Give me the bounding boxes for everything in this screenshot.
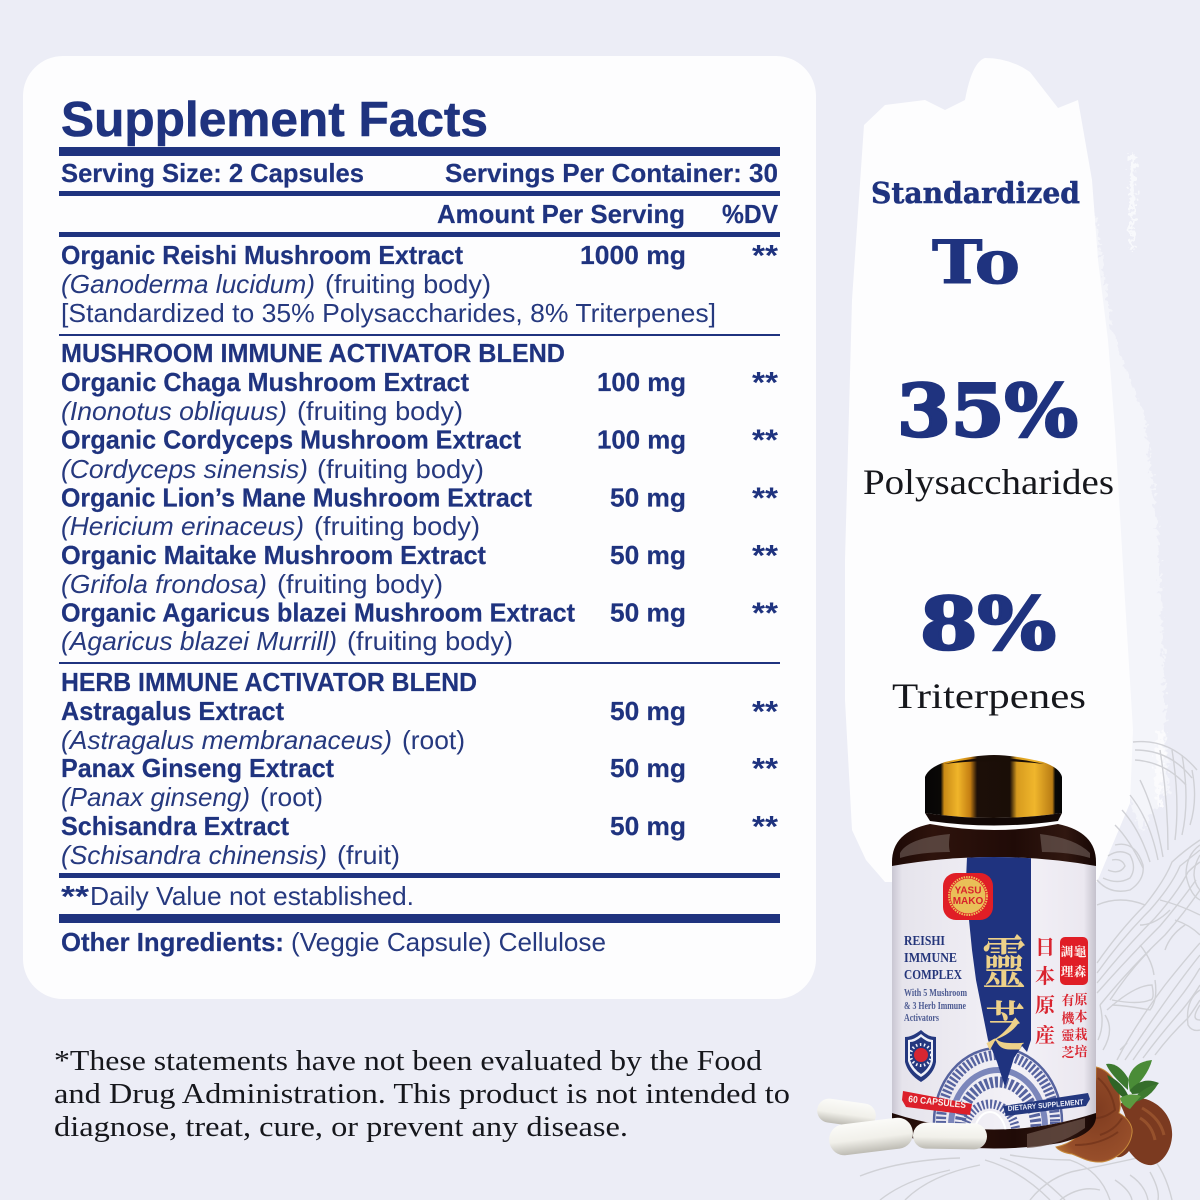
- glass base reflection: [1027, 1118, 1085, 1148]
- mushroom fan illustration: [932, 1048, 1064, 1130]
- mushroom immune activator blend: Organic Cordyceps Mushroom Extract: [61, 424, 521, 454]
- herb immune activator blend: (Panax ginseng): [61, 782, 250, 812]
- serving information: Serving Size: 2 Capsules: [61, 158, 364, 188]
- herb immune activator blend: 50 mg: [610, 811, 686, 841]
- red vertical origin text: [1035, 931, 1056, 1048]
- herb immune activator blend: (root): [402, 725, 465, 755]
- mushroom immune activator blend: (Hericium erinaceus): [61, 511, 304, 541]
- dietary supplement banner: [1003, 1093, 1090, 1116]
- mushroom immune activator blend: MUSHROOM IMMUNE ACTIVATOR BLEND: [61, 338, 565, 368]
- mushroom immune activator blend: [61, 338, 778, 656]
- mushroom immune activator blend: (Inonotus obliquus): [61, 396, 287, 426]
- mushroom immune activator blend: Organic Maitake Mushroom Extract: [61, 540, 486, 570]
- panel: supplement facts: [23, 56, 816, 999]
- mushroom immune activator blend: Organic Lion’s Mane Mushroom Extract: [61, 482, 532, 512]
- mushroom immune activator blend: Organic Agaricus blazei Mushroom Extract: [61, 598, 575, 628]
- shield icon: [905, 1030, 936, 1082]
- reishi extract row: [61, 240, 778, 328]
- standardized heading: Standardized: [871, 176, 1080, 210]
- gold characters: 靈: [982, 917, 1026, 1000]
- mushroom immune activator blend: 100 mg: [597, 424, 686, 454]
- red seal: 龜: [1074, 942, 1087, 960]
- column headers: %DV: [722, 199, 779, 229]
- mushroom immune activator blend: 50 mg: [610, 540, 686, 570]
- herb immune activator blend: **: [752, 752, 778, 786]
- mushroom immune activator blend: **: [752, 366, 778, 400]
- red seal: 理: [1061, 962, 1074, 980]
- mushroom immune activator blend: **: [752, 540, 778, 572]
- shoulder highlights: [900, 834, 1090, 858]
- to heading: To: [932, 228, 1020, 298]
- red organic text: 有: [1061, 990, 1075, 1009]
- reishi extract row: (fruiting body): [325, 269, 491, 299]
- herb immune activator blend: **: [752, 810, 778, 844]
- brand logo: MAKO: [953, 896, 983, 907]
- FDA disclaimer: and Drug Administration. This product is not intended to: [54, 1078, 790, 1110]
- product subtitle: With 5 Mushroom: [904, 988, 968, 999]
- red organic text: 原: [1074, 989, 1088, 1008]
- red organic text: 培: [1074, 1041, 1088, 1060]
- mushroom immune activator blend: Organic Chaga Mushroom Extract: [61, 367, 469, 397]
- green leaves: [1106, 1060, 1159, 1109]
- mushroom immune activator blend: (fruiting body): [317, 454, 484, 484]
- herb immune activator blend: 50 mg: [610, 753, 686, 783]
- herb immune activator blend: (fruit): [337, 840, 400, 870]
- red vertical origin text: 原: [1035, 989, 1056, 1018]
- amber glass body: [892, 824, 1096, 1148]
- dietary supplement banner: DIETARY SUPPLEMENT: [1007, 1097, 1084, 1113]
- other ingredients: Other Ingredients:: [61, 927, 284, 957]
- mushroom immune activator blend: **: [752, 424, 778, 457]
- FDA disclaimer: [54, 1045, 790, 1143]
- herb immune activator blend: (Astragalus membranaceus): [61, 725, 392, 755]
- product subtitle: & 3 Herb Immune: [904, 1001, 966, 1012]
- daily value note: **: [61, 880, 89, 914]
- mushroom immune activator blend: 50 mg: [610, 482, 686, 512]
- herb immune activator blend: Schisandra Extract: [61, 811, 289, 841]
- mushroom immune activator blend: **: [752, 482, 778, 515]
- red organic text: 靈: [1061, 1025, 1075, 1044]
- mushroom immune activator blend: (fruiting body): [314, 511, 480, 541]
- product name: COMPLEX: [904, 967, 962, 982]
- rear mushroom: [1116, 1098, 1172, 1165]
- reishi extract row: Organic Reishi Mushroom Extract: [61, 240, 463, 270]
- herb immune activator blend: (Schisandra chinensis): [61, 840, 327, 870]
- mushroom immune activator blend: (Grifola frondosa): [61, 569, 267, 599]
- red seal: [1060, 937, 1088, 985]
- red seal: 森: [1074, 962, 1087, 980]
- blue brush stripe: [966, 852, 1031, 1087]
- product name: IMMUNE: [904, 950, 957, 965]
- brand logo: [943, 873, 993, 920]
- mushroom sketch line art: [860, 742, 1200, 1200]
- reishi extract row: (Ganoderma lucidum): [61, 269, 315, 299]
- other ingredients: [61, 927, 606, 957]
- red seal: 調: [1061, 942, 1074, 960]
- title: Supplement Facts: [61, 93, 488, 147]
- red organic text: 機: [1061, 1008, 1075, 1027]
- FDA disclaimer: diagnose, treat, cure, or prevent any disease.: [54, 1111, 628, 1143]
- mushroom immune activator blend: (Cordyceps sinensis): [61, 454, 308, 484]
- red organic text: 本: [1074, 1006, 1088, 1025]
- table rules: [59, 147, 780, 923]
- herb immune activator blend: **: [752, 696, 778, 728]
- red vertical origin text: 産: [1035, 1019, 1055, 1048]
- red organic text: 芝: [1061, 1042, 1075, 1061]
- product bottle: [892, 755, 1096, 1148]
- product name: [904, 933, 962, 982]
- white capsules: [816, 1097, 987, 1157]
- herb immune activator blend: (root): [260, 782, 323, 812]
- other ingredients: (Veggie Capsule) Cellulose: [291, 927, 606, 957]
- column headers: Amount Per Serving: [437, 199, 685, 229]
- reishi mushrooms and leaves: [1056, 1060, 1172, 1165]
- bottle cap: [925, 755, 1062, 826]
- herb immune activator blend: 50 mg: [610, 696, 686, 726]
- FDA disclaimer: *These statements have not been evaluated by the Food: [54, 1045, 763, 1077]
- herb immune activator blend: [61, 667, 778, 870]
- product name: REISHI: [904, 933, 945, 948]
- herb immune activator blend: Astragalus Extract: [61, 696, 284, 726]
- front mushroom: [1056, 1067, 1132, 1162]
- reishi extract row: 1000 mg: [580, 240, 686, 270]
- polysaccharides label: Polysaccharides: [863, 462, 1114, 502]
- gold characters: 芝: [985, 983, 1025, 1062]
- mushroom immune activator blend: (fruiting body): [277, 569, 443, 599]
- mushroom immune activator blend: (fruiting body): [347, 626, 513, 656]
- product label: [892, 857, 1096, 1130]
- reishi extract row: [Standardized to 35% Polysaccharides, 8% Triterpenes]: [61, 298, 716, 328]
- gold characters: [982, 917, 1026, 1062]
- brush stroke background: [845, 58, 1168, 882]
- mushroom immune activator blend: **: [752, 597, 778, 630]
- 60 capsules banner: [902, 1091, 972, 1115]
- brand logo: YASU: [955, 886, 981, 896]
- mushroom immune activator blend: (fruiting body): [297, 396, 463, 426]
- herb immune activator blend: HERB IMMUNE ACTIVATOR BLEND: [61, 667, 477, 697]
- triterpenes label: Triterpenes: [892, 676, 1086, 716]
- serving information: Servings Per Container: 30: [445, 158, 778, 188]
- 60 capsules banner: 60 CAPSULES: [908, 1094, 967, 1111]
- mushroom immune activator blend: 50 mg: [610, 598, 686, 628]
- reishi extract row: **: [752, 240, 778, 272]
- 8 percent: 8%: [920, 581, 1056, 666]
- capsule three: [913, 1122, 987, 1150]
- capsule one: [816, 1097, 877, 1129]
- product subtitle: Activators: [904, 1013, 939, 1024]
- daily value note: Daily Value not established.: [90, 881, 414, 911]
- mushroom immune activator blend: 100 mg: [597, 367, 686, 397]
- red vertical origin text: 本: [1035, 960, 1055, 989]
- herb immune activator blend: Panax Ginseng Extract: [61, 753, 334, 783]
- capsule two: [827, 1116, 915, 1157]
- mushroom immune activator blend: (Agaricus blazei Murrill): [61, 626, 337, 656]
- red organic text: [1061, 989, 1088, 1061]
- 35 percent: 35%: [897, 368, 1078, 453]
- red organic text: 栽: [1074, 1024, 1088, 1043]
- product subtitle: [904, 988, 968, 1024]
- red vertical origin text: 日: [1035, 931, 1055, 960]
- serving information: [61, 158, 778, 188]
- standardized callout: [863, 176, 1114, 716]
